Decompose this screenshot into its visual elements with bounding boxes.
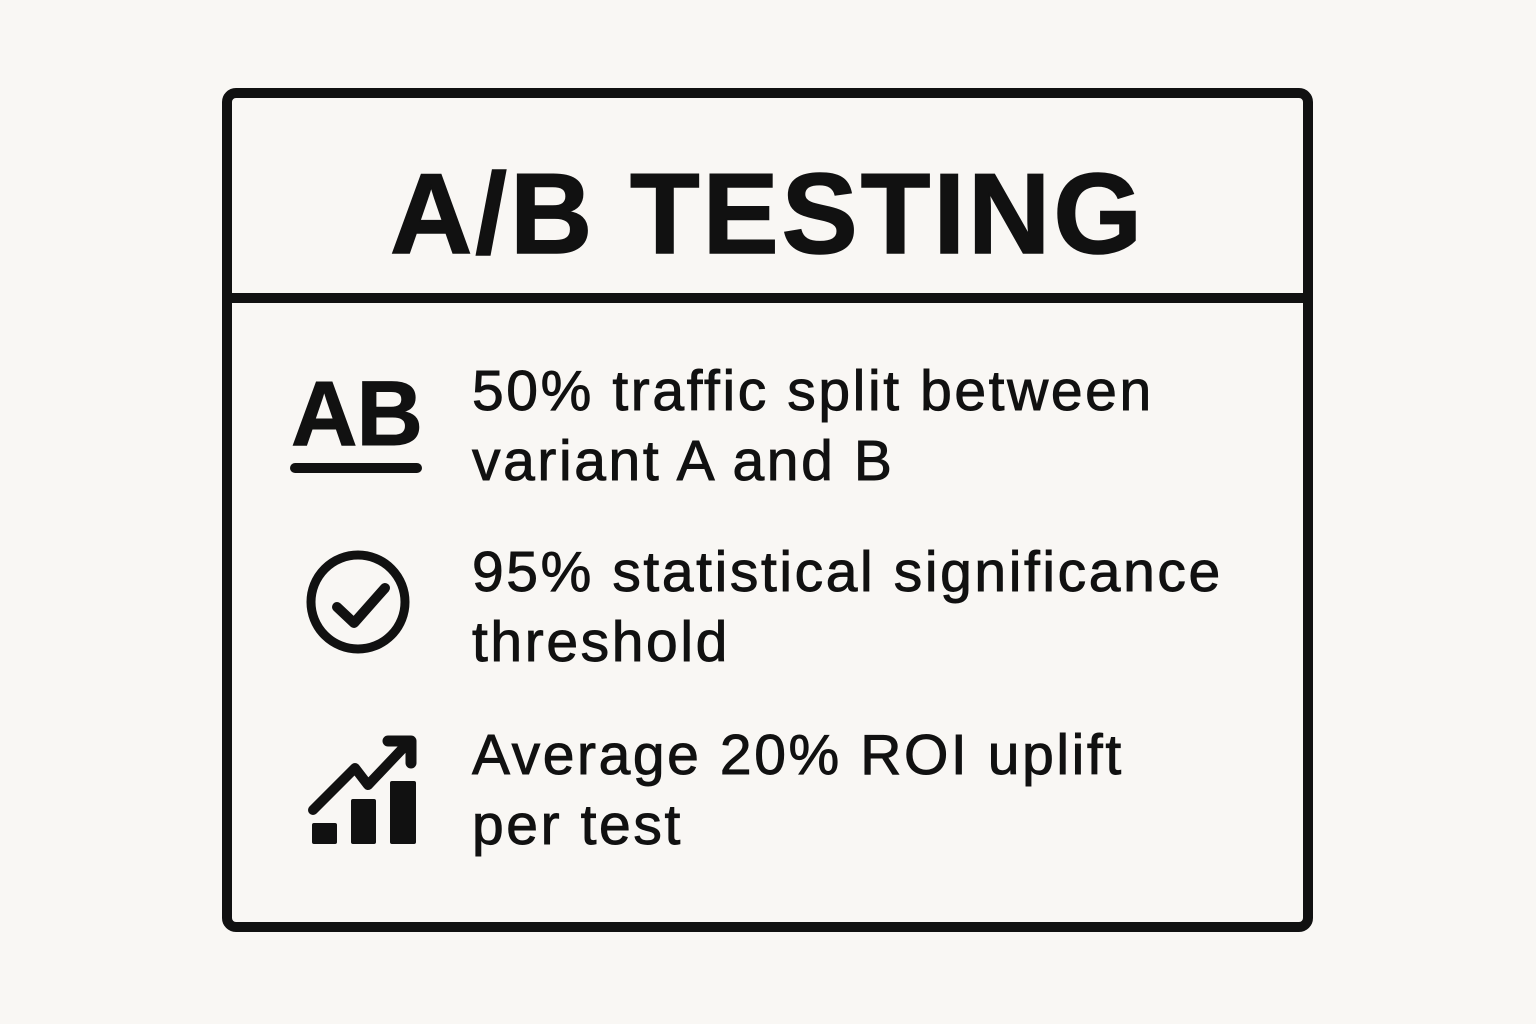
text: ROI: Average 20% ROI uplift [472,723,1124,787]
icon: check circle [306,550,410,654]
icon: growth chart [308,736,416,844]
text: ROI [472,723,1124,857]
panel: main frame [222,88,1313,932]
text: traffic split [472,359,1154,493]
text: ROI: per test [472,793,683,857]
text: traffic split: 50% traffic split between [472,359,1154,423]
text: significance: threshold [472,610,730,674]
text: significance [472,540,1223,674]
title: A/B TESTING [390,151,1145,278]
text: significance: 95% statistical significance [472,540,1223,604]
text: traffic split: variant A and B [472,429,894,493]
icon: AB: AB [291,363,422,465]
